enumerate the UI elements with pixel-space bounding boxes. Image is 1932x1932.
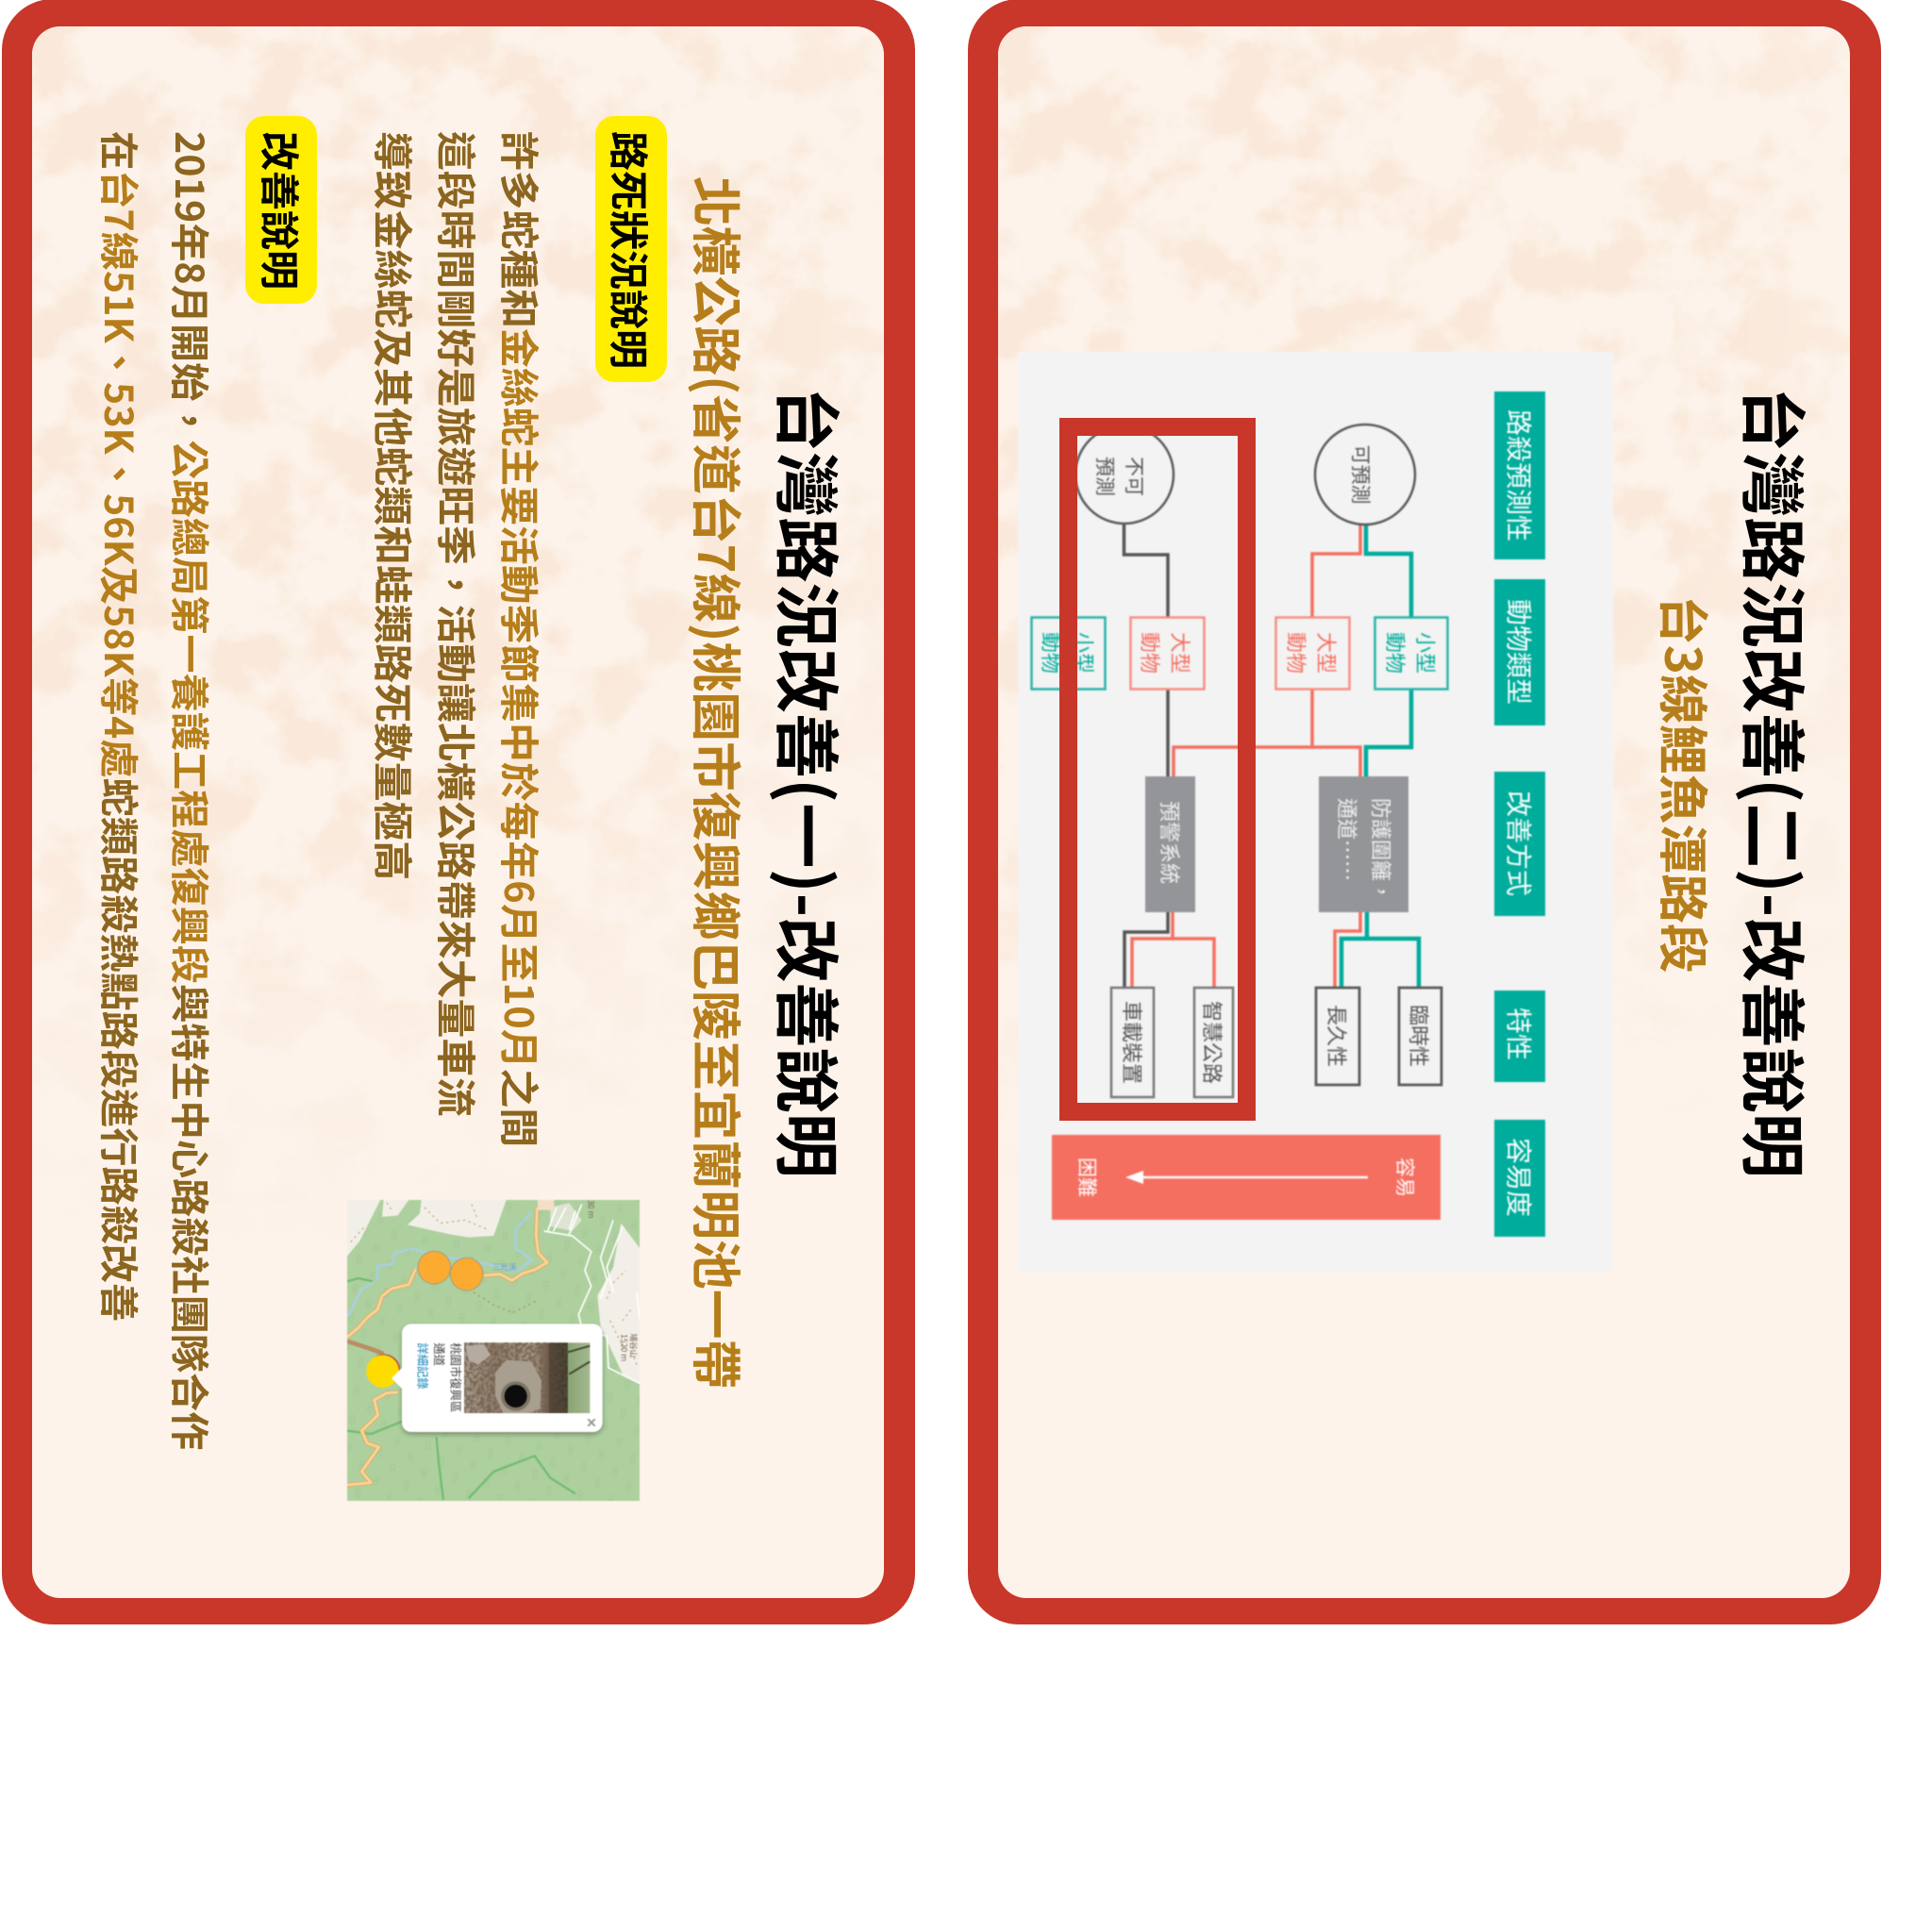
node: small animals right: 動物 <box>1381 632 1411 674</box>
node: predictable <box>1315 425 1415 525</box>
map labels: 三光溪 <box>492 1261 517 1273</box>
popup text: 桃園市復興區 <box>447 1342 464 1412</box>
popup text <box>415 1342 464 1412</box>
heading pill: road-kill situation <box>595 116 667 382</box>
panel: left card frame <box>2 0 915 1624</box>
node: small animals left: 小型 <box>1070 632 1100 674</box>
category label: predictability: 路殺預測性 <box>1501 409 1539 541</box>
map tree symbols <box>347 1200 640 1501</box>
node: permanent: 長久性 <box>1323 1005 1353 1067</box>
text: road-kill description line 2: 這段時間剛好是旅遊旺季，活動讓北橫公路帶來大量車流 <box>429 131 486 1117</box>
map: hotspot locations with popup <box>346 1200 640 1502</box>
panel background texture <box>998 26 1850 1598</box>
chart: prediction and improvement flow diagram <box>1017 351 1613 1272</box>
map rivers <box>347 1212 531 1318</box>
node: warning system <box>1145 776 1195 912</box>
node: unpredictable: 預測 <box>1091 457 1120 496</box>
map roads <box>347 1208 547 1485</box>
subtitle: left card: 北橫公路(省道台7線)桃園市復興鄉巴陵至宜蘭明池一帶 <box>683 176 755 1389</box>
node: fences and passages: 通道…… <box>1333 798 1363 881</box>
heading pill: improvement <box>245 116 317 304</box>
map contour dashes <box>351 1203 637 1365</box>
node: large animals left: 動物 <box>1136 632 1166 674</box>
heading text: road-kill situation: 路死狀況說明 <box>602 131 659 369</box>
category label: animal type: 動物類型 <box>1501 599 1539 705</box>
title: left card: 台灣路況改善(一)-改善說明 <box>764 387 858 1178</box>
map marker: orange hotspots <box>418 1251 483 1291</box>
node: unpredictable <box>1075 425 1174 524</box>
popup text: 通道 <box>431 1342 448 1366</box>
node: large animals left: 大型 <box>1166 632 1196 674</box>
node: small animals right: 小型 <box>1411 632 1441 674</box>
node: large animals right: 動物 <box>1282 632 1312 674</box>
subtitle: right card: 台3線鯉魚潭路段 <box>1650 595 1722 974</box>
map land patches <box>347 1200 640 1384</box>
popup close icon <box>588 1419 595 1426</box>
map white trails <box>544 1205 640 1384</box>
node: small animals left <box>1032 617 1106 689</box>
node: unpredictable: 不可 <box>1121 457 1149 496</box>
bar: ease to difficulty arrow <box>1052 1135 1441 1220</box>
category label: predictability <box>1494 391 1545 559</box>
node: fences and passages <box>1319 776 1408 912</box>
heading text: improvement: 改善說明 <box>253 131 310 290</box>
node: predictable: 可預測 <box>1347 445 1375 504</box>
text: improvement description line 1: 2019年8月開始， 公路總局第一養護工程處復興段 與特生中心路殺社團隊合作 <box>164 131 221 1450</box>
category label: ease <box>1494 1120 1545 1237</box>
map labels: 1520 m <box>618 1334 629 1361</box>
category label: ease: 容易度 <box>1501 1138 1539 1217</box>
map labels: 30 m <box>585 1200 596 1219</box>
connector lines <box>1124 524 1419 988</box>
node: large animals left <box>1130 617 1204 689</box>
map green paths <box>347 1278 575 1500</box>
category label: characteristics <box>1494 991 1545 1082</box>
category label: improvement method <box>1494 772 1545 916</box>
title: right card: 台灣路況改善(二)-改善說明 <box>1730 387 1824 1178</box>
highlight frame: unpredictable branch <box>1059 418 1256 1121</box>
map popup <box>391 1324 603 1435</box>
category label: animal type <box>1494 579 1545 725</box>
node: fences and passages: 防護圍籬， <box>1367 798 1397 902</box>
node: large animals right: 大型 <box>1312 632 1342 674</box>
text: road-kill description line 3: 導致金絲蛇及其他蛇類和蛙類路死數量極高 <box>366 131 423 880</box>
node: smart road: 智慧公路 <box>1198 1001 1228 1084</box>
node: warning system: 預警系統 <box>1156 801 1186 884</box>
text: road-kill description line 1: 許多蛇種和 金絲蛇主要活動季節集中於每年6月至10月 之間 <box>492 131 549 1147</box>
node: large animals right <box>1275 617 1349 689</box>
bar: ease to difficulty arrow: 容易 <box>1391 1158 1420 1197</box>
popup photo: culvert pipe <box>464 1342 590 1413</box>
node: small animals right <box>1375 617 1447 689</box>
map labels <box>492 1200 639 1361</box>
node: on-board device <box>1111 988 1154 1097</box>
map labels: 埔谷山 <box>627 1333 639 1357</box>
node: smart road <box>1194 988 1233 1097</box>
node: temporary <box>1399 988 1441 1085</box>
node: small animals left: 動物 <box>1037 632 1067 674</box>
popup text: 詳細記錄 <box>415 1342 432 1390</box>
map marker: selected hotspot <box>366 1354 400 1388</box>
bar: ease to difficulty arrow: 困難 <box>1074 1158 1102 1197</box>
category label: improvement method: 改善方式 <box>1501 791 1539 896</box>
node: permanent <box>1316 988 1359 1085</box>
node: on-board device: 車載裝置 <box>1118 1001 1148 1084</box>
map road shield <box>538 1200 554 1210</box>
node: temporary: 臨時性 <box>1405 1005 1435 1067</box>
panel background texture <box>32 26 884 1598</box>
text: improvement description line 2: 在 台7線51K、53K、56K及58K等4處 蛇類路殺熱點路段進行路殺改善 <box>93 131 150 1322</box>
category label: characteristics: 特性 <box>1501 1008 1539 1060</box>
panel: right card frame <box>968 0 1881 1624</box>
